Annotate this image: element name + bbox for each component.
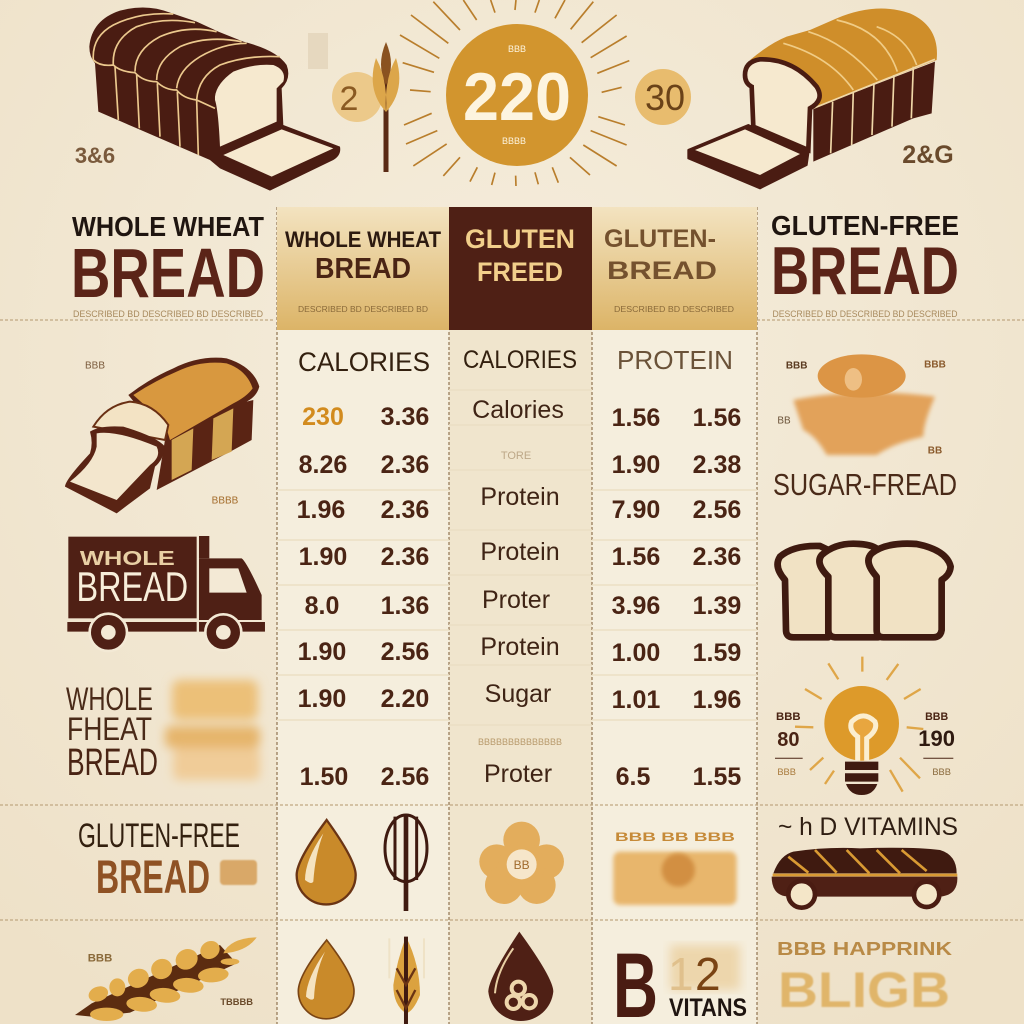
left small label: 3&6 <box>75 143 115 168</box>
column 3 numbers: 7.90 <box>612 496 660 524</box>
icon: wheat stalk <box>373 42 399 172</box>
column 3 numbers: 1.56 <box>612 404 660 432</box>
column 1 numbers: 2.56 <box>381 763 429 791</box>
right small label: 2&G <box>902 141 954 169</box>
column 1 numbers: 1.90 <box>299 543 347 571</box>
column 3 numbers: 1.90 <box>612 451 660 479</box>
icon: lightbulb: 80 <box>777 729 799 751</box>
left loaf illustration <box>89 7 340 191</box>
icon: lightbulb <box>775 657 955 795</box>
text: gluten-free bread lower left: BREAD <box>96 850 210 903</box>
text: whole fheat bread: FHEAT <box>67 711 152 747</box>
text: whole fheat bread <box>66 681 158 784</box>
column 2 nutrient labels: Protein <box>480 538 560 566</box>
sunburst rays <box>400 0 629 186</box>
icon: wheat ear lower left: TBBBB <box>220 997 253 1007</box>
sun badge with 220: BBB <box>508 44 526 54</box>
column 3 numbers: 2.38 <box>693 451 741 479</box>
column 2 nutrient labels: Protein <box>480 633 560 661</box>
column 2 nutrient labels: Protein <box>480 483 560 511</box>
column header 1: WHOLE WHEAT <box>285 227 442 252</box>
icon: bread truck: WHOLE <box>80 547 175 570</box>
icon: flower badge: BB <box>514 858 530 872</box>
column 1 numbers: 8.26 <box>299 451 347 479</box>
icon: blurred bread stack <box>165 680 260 780</box>
icon: whisk <box>385 815 427 911</box>
icon: lightbulb: 190 <box>918 726 955 751</box>
column 1 numbers <box>297 403 429 791</box>
column backgrounds <box>0 207 1024 1024</box>
column 3 numbers: 1.56 <box>612 543 660 571</box>
text: sugar-fread: SUGAR-FREAD <box>773 467 957 502</box>
icon: lightbulb: BBB <box>925 711 948 723</box>
side badge 2: 2 <box>340 80 358 118</box>
text: vitamins heading: ~ h D VITAMINS <box>778 813 958 841</box>
column 2 nutrient labels: Proter <box>482 586 550 614</box>
column 3 numbers: 6.5 <box>616 763 650 791</box>
column header 1: BREAD <box>315 253 411 285</box>
icon: bread truck: BREAD <box>76 563 188 610</box>
icon: flower badge <box>479 822 564 904</box>
heading: whole wheat bread left: WHOLE WHEAT <box>72 211 264 242</box>
column 3 numbers: 1.59 <box>693 639 741 667</box>
column header 1 <box>277 207 449 330</box>
side badge 2 <box>308 33 382 122</box>
column 2 nutrient labels: TORE <box>501 450 531 462</box>
icon: orange blurred bread: BB <box>928 445 942 456</box>
text: lower right faded heading: BBB HAPPRINK <box>777 939 952 959</box>
row labels: PROTEIN <box>617 345 733 375</box>
row labels <box>298 345 733 377</box>
icon: three bread slices <box>778 544 951 637</box>
row labels: CALORIES <box>298 347 430 377</box>
heading: gluten-free bread right <box>771 210 959 319</box>
row labels: CALORIES <box>463 346 577 374</box>
column 3 numbers: 1.00 <box>612 639 660 667</box>
column 2 nutrient labels <box>472 396 564 788</box>
column 1 numbers: 1.96 <box>297 496 345 524</box>
icon: lightbulb: BBB <box>776 711 801 723</box>
icon: blurred grain panel: BBB BB BBB <box>615 830 735 844</box>
text: whole fheat bread: BREAD <box>67 742 158 784</box>
icon: orange blurred bread: BBB <box>924 359 946 370</box>
icon: wheat ear lower left: BBB <box>88 953 112 965</box>
column 2 nutrient labels: Proter <box>484 760 552 788</box>
column 3 numbers: 1.56 <box>693 404 741 432</box>
column 3 numbers: 1.01 <box>612 686 660 714</box>
icon: wheat ear lower left <box>75 937 257 1021</box>
column 3 numbers: 2.56 <box>693 496 741 524</box>
icon: brown drop with symbol <box>488 932 553 1021</box>
heading: gluten-free bread right: GLUTEN-FREE <box>771 210 959 241</box>
right loaf illustration <box>688 9 937 188</box>
text: B vitamins: 1 <box>668 948 694 1000</box>
icon: orange blurred bread <box>777 354 946 456</box>
text: whole fheat bread: WHOLE <box>66 681 153 717</box>
text: gluten-free bread lower left <box>78 817 257 903</box>
heading: whole wheat bread left: DESCRIBED BD DESCRIBED BD DESCRIBED <box>73 309 263 319</box>
column 3 numbers: 3.96 <box>612 592 660 620</box>
icon: bread truck <box>67 536 265 651</box>
side badge 30 <box>635 69 691 125</box>
column 2 nutrient labels: BBBBBBBBBBBBBB <box>478 737 562 747</box>
column header 2: GLUTEN <box>465 224 575 254</box>
column 3 numbers: 1.55 <box>693 763 741 791</box>
heading: whole wheat bread left <box>71 211 265 319</box>
text: lower right faded heading: BLIGB <box>778 962 950 1018</box>
column 1 numbers: 1.90 <box>298 638 346 666</box>
column 3 numbers: 2.36 <box>693 543 741 571</box>
column 2 nutrient labels: Calories <box>472 396 564 424</box>
side badge 30: 30 <box>645 77 685 118</box>
icon: orange blurred bread: BB <box>777 415 791 426</box>
text: B vitamins <box>613 935 747 1024</box>
column 1 numbers: 2.20 <box>381 685 429 713</box>
column 1 numbers: 230 <box>302 403 344 431</box>
column 2 nutrient labels: Sugar <box>485 680 551 708</box>
column header 2 <box>449 207 592 330</box>
icon: sliced loaf left: BBB <box>85 360 105 371</box>
icon: baguette vehicle <box>772 848 957 908</box>
column 1 numbers: 1.36 <box>381 592 429 620</box>
column 1 numbers: 1.90 <box>298 685 346 713</box>
heading: gluten-free bread right: DESCRIBED BD DESCRIBED BD DESCRIBED <box>772 309 958 319</box>
column header 3: BREAD <box>607 257 717 285</box>
icon: orange blurred bread: BBB <box>786 360 807 371</box>
heading: whole wheat bread left: BREAD <box>71 234 265 312</box>
column 3 numbers: 1.96 <box>693 686 741 714</box>
column 3 numbers: 1.39 <box>693 592 741 620</box>
column 1 numbers: 2.56 <box>381 638 429 666</box>
column 1 numbers: 2.36 <box>381 496 429 524</box>
icon: wheat stalk lower <box>389 937 424 1024</box>
column 1 numbers: 2.36 <box>381 451 429 479</box>
icon: sliced loaf left <box>65 358 259 513</box>
icon: blurred grain panel <box>613 830 737 905</box>
text: B vitamins: 2 <box>695 948 721 1000</box>
column 1 numbers: 1.50 <box>300 763 348 791</box>
icon: lightbulb: BBB <box>777 767 796 777</box>
heading: gluten-free bread right: BREAD <box>771 233 959 309</box>
sun badge with 220 <box>446 24 588 166</box>
sun badge with 220: BBBB <box>502 136 526 146</box>
column header 3: DESCRIBED BD DESCRIBED <box>614 305 734 314</box>
text: B vitamins: VITANS <box>669 994 747 1022</box>
column 3 numbers <box>612 404 741 791</box>
sun badge with 220: 220 <box>463 59 571 135</box>
column header 2: FREED <box>477 257 563 287</box>
column 1 numbers: 8.0 <box>305 592 339 620</box>
icon: sliced loaf left: BBBB <box>212 495 239 506</box>
column header 3: GLUTEN- <box>604 225 716 253</box>
text: gluten-free bread lower left: GLUTEN-FREE <box>78 817 240 855</box>
column 1 numbers: 3.36 <box>381 403 429 431</box>
column header 1: DESCRIBED BD DESCRIBED BD <box>298 305 428 314</box>
icon: oil drop 1 <box>297 820 356 904</box>
icon: lightbulb: BBB <box>932 767 951 777</box>
column 1 numbers: 2.36 <box>381 543 429 571</box>
text: lower right faded heading <box>777 939 952 1018</box>
icon: oil drop 2 <box>298 940 354 1019</box>
column header 3 <box>592 207 757 330</box>
